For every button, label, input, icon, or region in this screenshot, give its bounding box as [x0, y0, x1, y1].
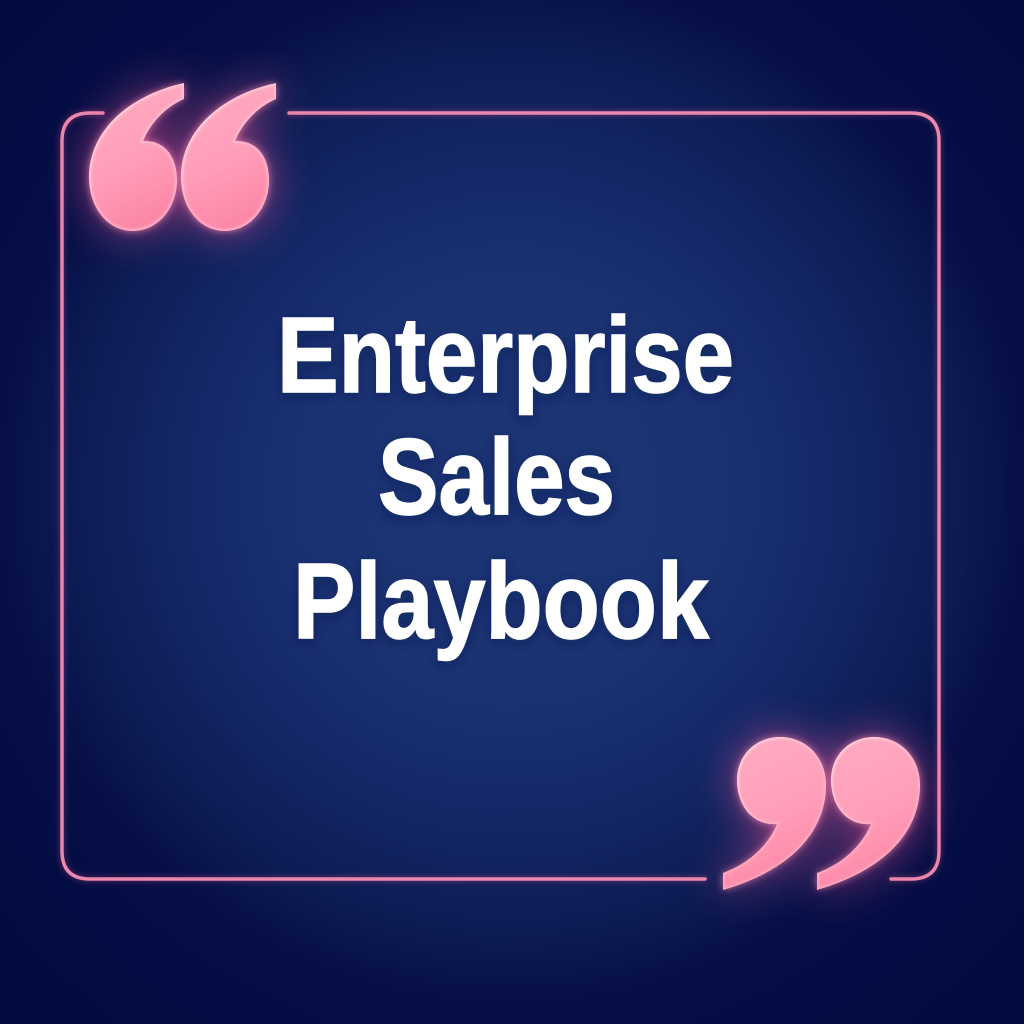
title [277, 294, 734, 661]
rounded frame [62, 113, 939, 879]
title: Enterprise [277, 294, 734, 415]
title: Sales [378, 416, 615, 537]
closing quotation mark [723, 737, 920, 890]
title: Playbook [293, 540, 710, 661]
opening quotation mark [89, 83, 276, 231]
